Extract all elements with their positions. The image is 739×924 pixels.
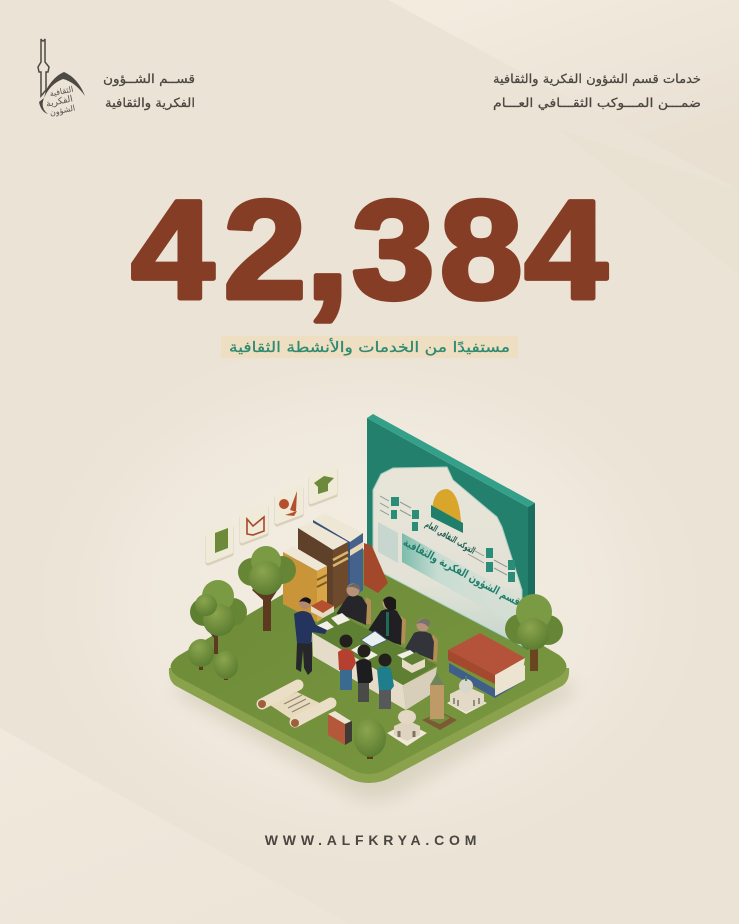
- book stack right: [448, 633, 525, 698]
- table items: [311, 600, 425, 673]
- header text: [493, 71, 701, 111]
- seated man three: [403, 618, 438, 662]
- header text: خدمات قسم الشؤون الفكرية والثقافية: [493, 71, 701, 87]
- children: [338, 634, 394, 709]
- front tree: [354, 719, 386, 759]
- seated staff: [336, 584, 438, 662]
- logo label: [103, 71, 195, 111]
- table: [311, 610, 437, 710]
- logo: الشؤون: [49, 103, 76, 118]
- standing man: [294, 597, 327, 675]
- back tree: [238, 546, 296, 631]
- trees: [188, 546, 563, 759]
- stack on table: [311, 600, 334, 618]
- logo: [38, 39, 85, 118]
- red leaning book: [364, 543, 388, 593]
- yellow book: [283, 546, 327, 622]
- header text: ضمـــن المـــوكب الثقـــافي العـــام: [493, 95, 701, 111]
- child teal: [377, 654, 394, 709]
- upright book: [328, 711, 352, 745]
- big number: 2: [224, 171, 306, 328]
- left tree: [190, 580, 247, 654]
- board emblem: الموكب الثقافي العام: [423, 520, 476, 557]
- isometric illustration: [169, 414, 574, 800]
- child red: [338, 634, 356, 690]
- board minaret thumbnail: [378, 522, 398, 563]
- platform: [169, 549, 574, 800]
- right tree: [505, 594, 563, 671]
- board small icons: [380, 496, 515, 582]
- icon tiles: [208, 467, 335, 563]
- big number: 4: [131, 171, 214, 328]
- big number: ,: [305, 162, 349, 330]
- subtitle badge: [221, 336, 518, 358]
- seated man two: [367, 596, 406, 645]
- scroll: [258, 685, 331, 727]
- website url: WWW.ALFKRYA.COM: [265, 832, 481, 848]
- big number: 3: [352, 171, 434, 328]
- logo: الثقافية: [49, 85, 74, 98]
- capitol building: [447, 676, 487, 714]
- big number: 8: [440, 171, 522, 328]
- big number: 4: [525, 171, 607, 328]
- small bushes: [188, 639, 238, 680]
- green stack on table: [402, 652, 425, 673]
- logo label: قســم الشــؤون: [103, 71, 195, 87]
- tower monument: [422, 673, 457, 730]
- teal board: [367, 414, 535, 650]
- large books: [283, 513, 388, 622]
- brown book: [298, 522, 348, 610]
- blue book: [313, 513, 363, 600]
- board emblem: [423, 489, 476, 557]
- seated man one: [336, 584, 371, 625]
- domed building: [387, 710, 427, 746]
- subtitle badge: مستفيدًا من الخدمات والأنشطة الثقافية: [229, 338, 510, 356]
- logo label: الفكرية والثقافية: [105, 95, 195, 111]
- child black: [356, 644, 373, 702]
- logo: الفكرية: [45, 94, 74, 110]
- board caption: قسم الشؤون الفكرية والثقافية: [401, 536, 523, 609]
